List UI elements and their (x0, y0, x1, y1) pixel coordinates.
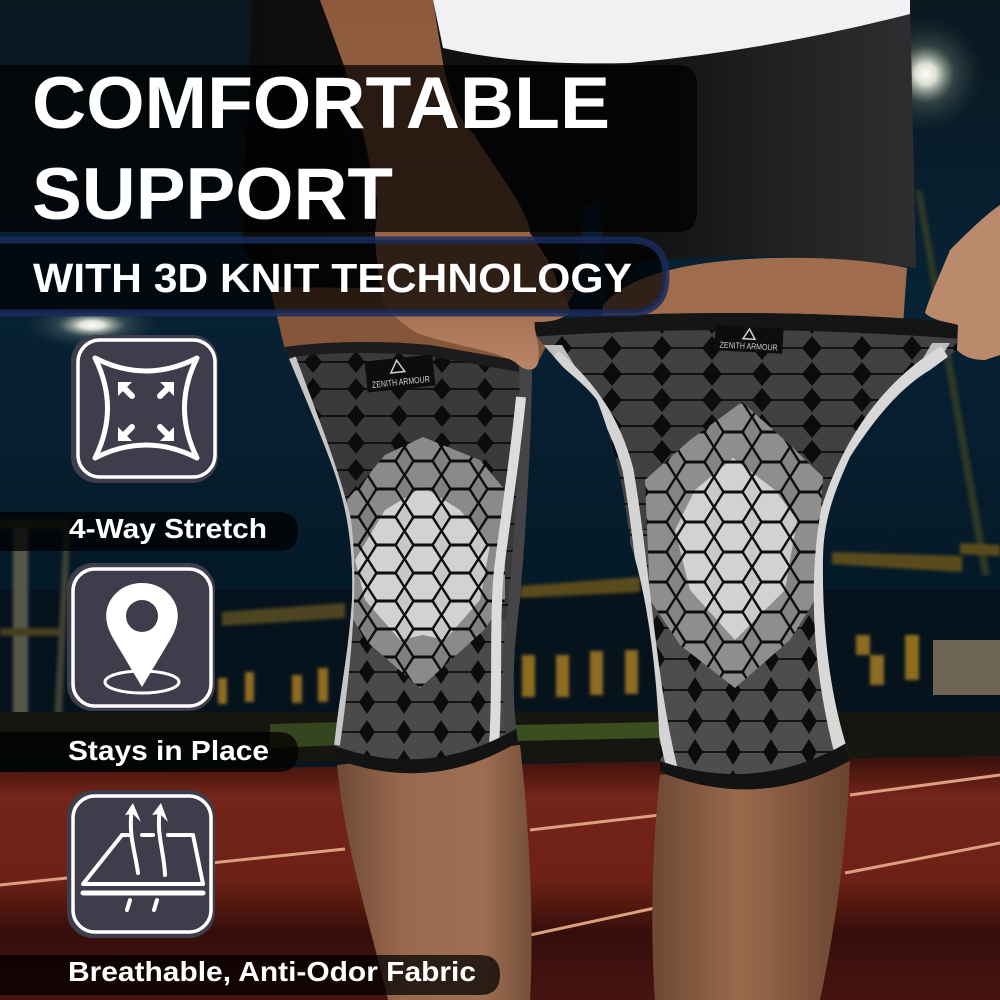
shorts (242, 0, 916, 300)
label: breathable anti-odor fabric (0, 955, 500, 995)
right thigh (600, 258, 907, 335)
logo tag left: ZENITH ARMOUR (371, 374, 431, 390)
icon: 4-way stretch (71, 335, 218, 483)
left calf (337, 745, 532, 1000)
subheading band (0, 240, 666, 313)
icon: location pin (67, 563, 215, 711)
label: 4-way stretch (0, 512, 298, 551)
left thigh (270, 287, 575, 368)
knee sleeve right (530, 310, 962, 800)
logo tag right (714, 325, 784, 354)
stadium seats (218, 635, 919, 704)
heading panel (0, 63, 697, 235)
right hand (925, 205, 1000, 360)
label: stays in place: Stays in Place (68, 735, 269, 766)
logo tag right: ZENITH ARMOUR (719, 339, 778, 353)
label: breathable anti-odor fabric: Breathable, Anti-Odor Fabric (68, 956, 476, 987)
knee sleeve left (280, 335, 535, 790)
stadium light left (24, 301, 160, 349)
icon: breathable fabric (67, 790, 215, 938)
athlete (242, 0, 1000, 1000)
logo tag left (365, 355, 435, 392)
right calf (652, 755, 850, 1000)
stadium light right (868, 16, 984, 132)
heading line 1: COMFORTABLE (32, 63, 610, 144)
label: stays in place (0, 732, 298, 772)
soccer goal (0, 519, 70, 762)
heading line 2: SUPPORT (32, 154, 393, 235)
subheading band: WITH 3D KNIT TECHNOLOGY (33, 255, 632, 301)
label: 4-way stretch: 4-Way Stretch (69, 513, 267, 544)
left forearm and fist (320, 0, 570, 370)
white shirt (433, 0, 910, 63)
